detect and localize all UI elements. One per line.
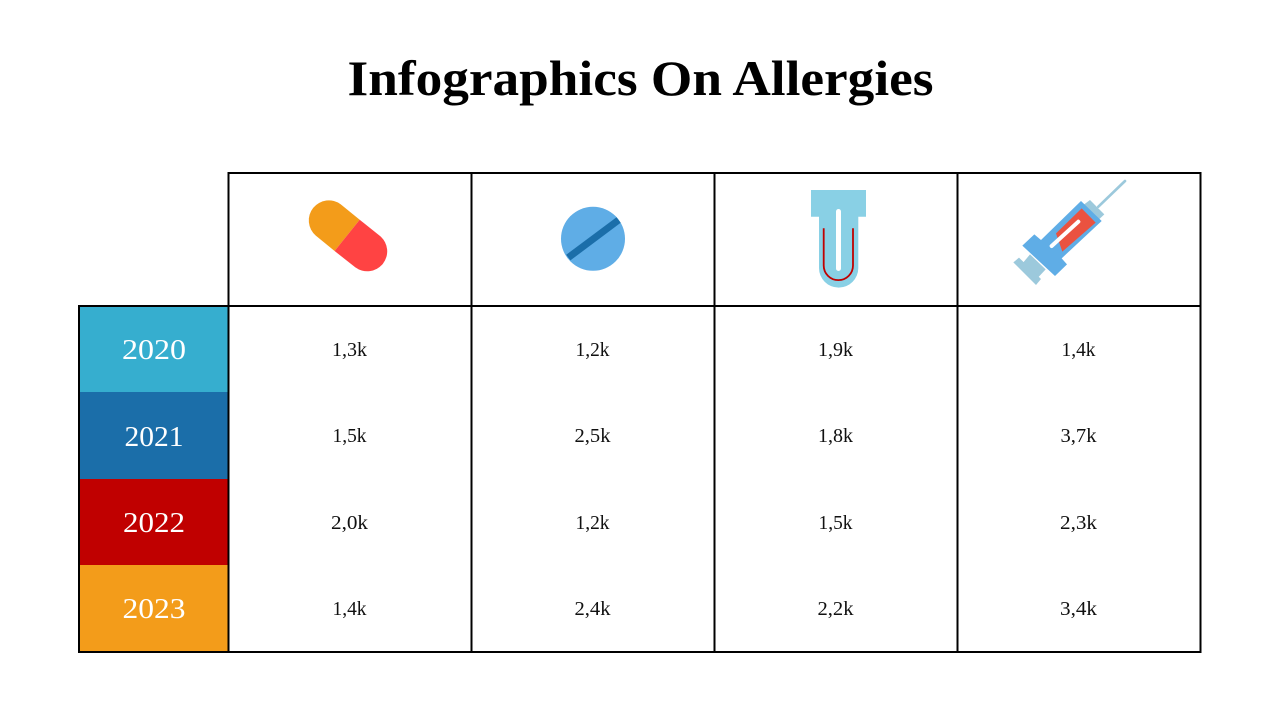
values: 2022 row: 2,0k — [331, 512, 368, 534]
values: 2023 row: 2,2k — [818, 598, 854, 620]
values: 2023 row: 2,4k — [574, 598, 610, 620]
icon: capsule — [309, 200, 387, 271]
year row: 2022: 2022 — [123, 508, 185, 539]
table grid — [79, 172, 1201, 653]
year row: 2020 — [79, 306, 228, 392]
values: 2020 row: 1,4k — [1062, 339, 1096, 361]
year row: 2020: 2020 — [122, 335, 186, 366]
values: 2021 row: 2,5k — [574, 425, 610, 447]
values: 2023 row: 1,4k — [332, 598, 366, 620]
values: 2020 row — [332, 339, 1096, 361]
values: 2022 row — [331, 512, 1097, 534]
year row: 2021 — [79, 392, 228, 479]
table — [79, 172, 1201, 653]
values: 2021 row — [332, 425, 1096, 447]
values: 2022 row: 1,2k — [576, 512, 610, 534]
values: 2021 row: 1,5k — [332, 425, 366, 447]
values: 2020 row: 1,9k — [818, 339, 853, 361]
values: 2022 row: 1,5k — [818, 512, 852, 534]
values: 2020 row: 1,2k — [576, 339, 610, 361]
values: 2021 row: 1,8k — [818, 425, 853, 447]
icon: syringe — [1013, 181, 1125, 285]
year row: 2023 — [79, 565, 228, 652]
icon: test tube — [811, 190, 866, 288]
values: 2022 row: 2,3k — [1060, 512, 1097, 534]
year row: 2023: 2023 — [122, 594, 186, 625]
values: 2023 row: 3,4k — [1060, 598, 1097, 620]
icon: tablet — [561, 207, 625, 271]
values: 2021 row: 3,7k — [1060, 425, 1096, 447]
year row: 2022 — [79, 479, 228, 565]
values: 2020 row: 1,3k — [332, 339, 367, 361]
values: 2023 row — [332, 598, 1097, 620]
year row: 2021: 2021 — [124, 422, 184, 453]
title: Infographics On Allergies — [348, 50, 934, 106]
